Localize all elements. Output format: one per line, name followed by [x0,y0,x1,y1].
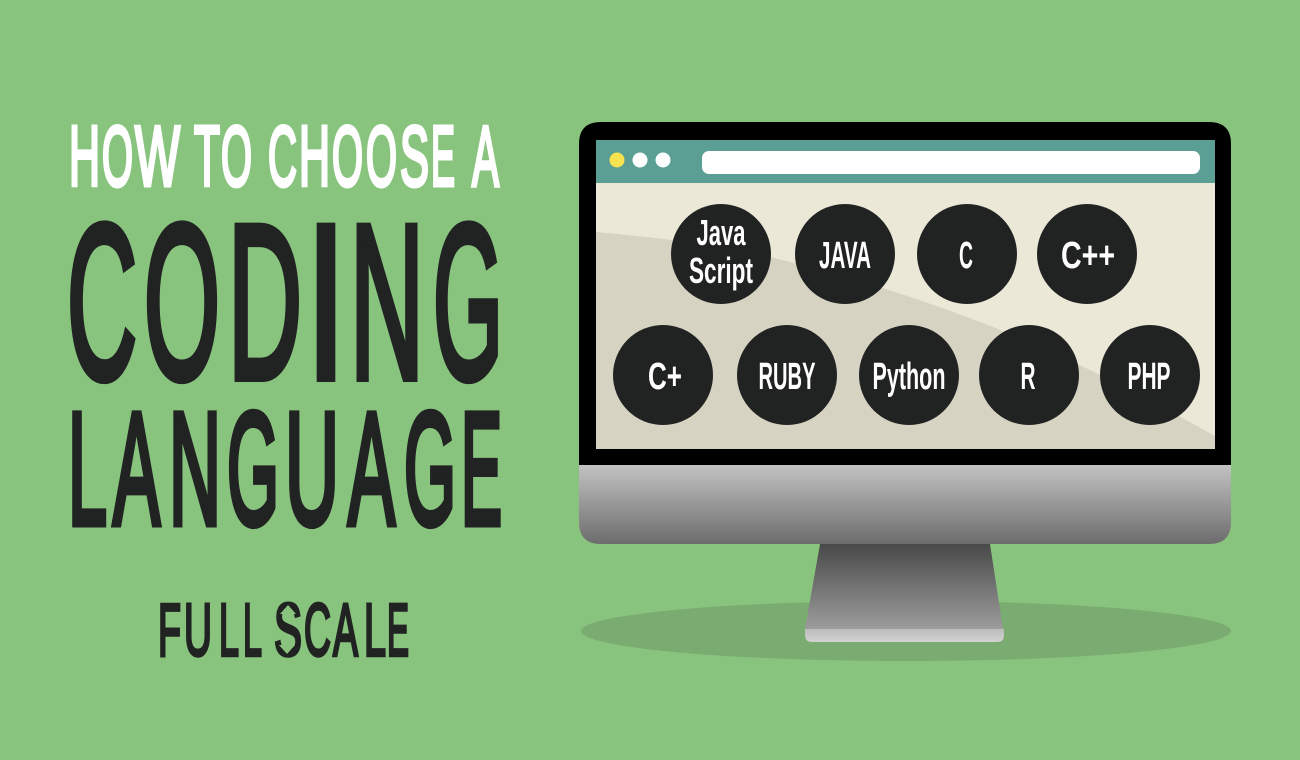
language bubble: C [917,204,1017,304]
logo: full scale: L [219,588,239,672]
logo: full scale: C [304,588,331,672]
title: how to choose a: O [102,110,133,204]
text: G [433,179,503,425]
title: language: N [169,379,221,558]
logo: full scale: L [364,588,386,672]
logo: full scale [158,588,409,672]
language bubble: JAVA [795,204,895,304]
language bubble: RUBY [737,325,837,425]
title: coding: C [67,179,137,425]
language bubble: JavaScript: Java [696,212,746,253]
title: how to choose a: C [268,110,297,204]
language bubble: C: C [959,235,973,277]
monitor chin [579,460,1231,544]
title: language: L [68,379,107,558]
language bubble: Python [859,325,959,425]
title: how to choose a: H [299,110,330,204]
text: E [461,379,502,558]
title: how to choose a: O [332,110,363,204]
screen [596,140,1215,449]
language bubble: C+ [613,325,713,425]
logo: full scale: U [184,588,212,672]
icon: up and down arrows in the S [279,605,296,654]
title: language: A [348,379,395,558]
logo: full scale: F [158,588,181,672]
title: how to choose a: W [135,110,180,204]
title: how to choose a: H [69,110,100,204]
browser toolbar [596,140,1215,183]
title: how to choose a: S [400,110,429,204]
logo: full scale: L [243,588,262,672]
monitor shadow [581,601,1231,661]
language bubble: R: R [1020,356,1036,398]
title: how to choose a: E [431,110,455,204]
title: coding: O [144,179,220,425]
monitor bezel [579,122,1231,465]
language bubble: Python: Python [872,356,946,398]
title: how to choose a: T [194,110,220,204]
language bubble: JavaScript: Script [689,250,753,291]
monitor stand [805,544,1004,642]
language bubble: JavaScript [671,204,771,304]
title: coding: D [228,179,302,425]
title: language: U [285,379,339,558]
language bubble: C++: C++ [1061,235,1115,277]
logo: full scale: S [274,588,302,672]
title: language: G [404,379,456,558]
language bubble: C+: C+ [648,356,682,398]
language bubble: JAVA: JAVA [819,235,871,277]
language bubble: PHP [1100,325,1200,425]
text: E [387,588,409,672]
title: coding: I [306,179,346,425]
title: language: A [113,379,160,558]
language bubble: C++ [1037,204,1137,304]
logo: full scale: A [333,588,358,672]
title: coding: N [350,179,424,425]
language bubble: PHP: PHP [1128,356,1170,398]
title: language: G [227,379,279,558]
language bubble: RUBY: RUBY [758,356,816,398]
language bubble: R [979,325,1079,425]
title: how to choose a: O [366,110,397,204]
title: how to choose a: O [221,110,252,204]
text: A [472,110,499,204]
